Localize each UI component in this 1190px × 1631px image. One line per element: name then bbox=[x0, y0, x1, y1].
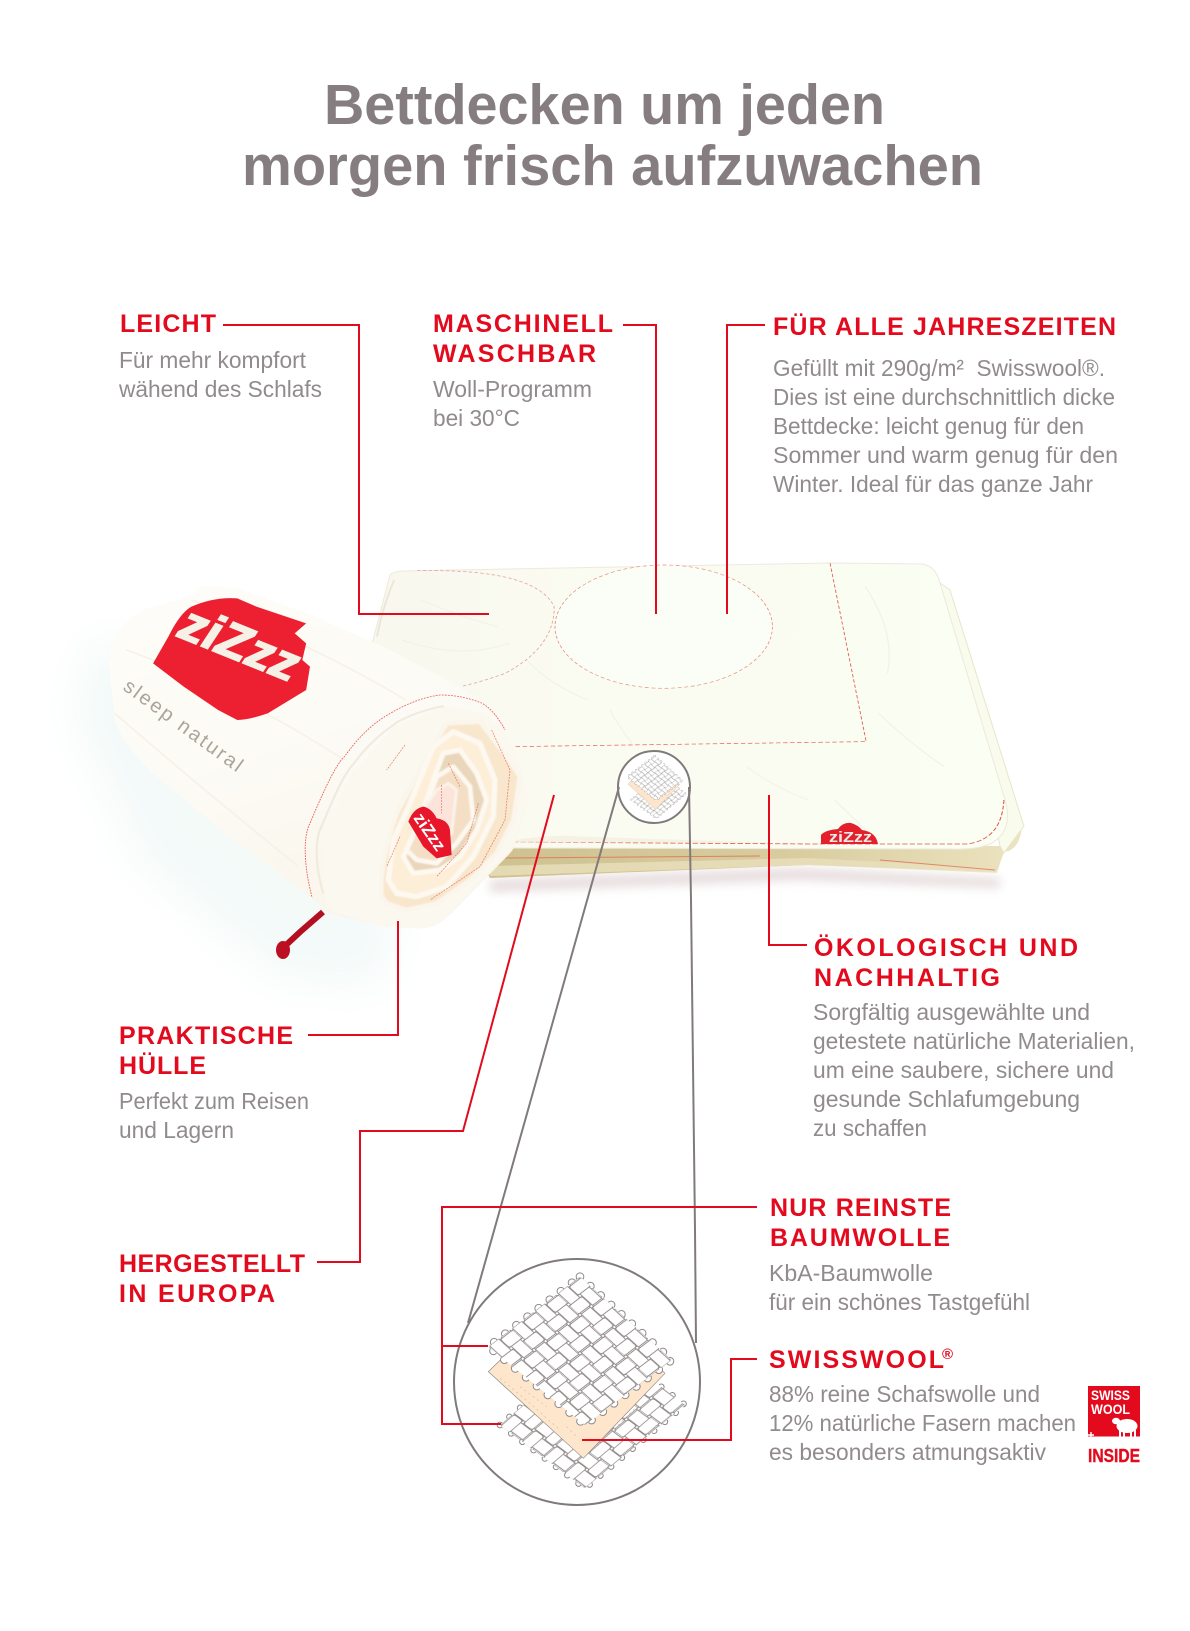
title: morgen frisch aufzuwachen bbox=[242, 134, 983, 198]
callout: Ökologisch und nachhaltig bbox=[813, 933, 1135, 1141]
callout: Ökologisch und nachhaltig: um eine saubere, sichere und bbox=[813, 1057, 1114, 1083]
leader line: Swisswool bbox=[582, 1359, 757, 1440]
callout: Maschinell waschbar: WASCHBAR bbox=[433, 340, 596, 368]
bag slogan: sleep natural bbox=[119, 675, 247, 777]
callout: Leicht: LEICHT bbox=[120, 310, 216, 338]
cord knot bbox=[276, 941, 290, 959]
callout: Nur reinste Baumwolle bbox=[769, 1194, 1030, 1315]
callout: Nur reinste Baumwolle: für ein schönes Tastgefühl bbox=[769, 1289, 1030, 1315]
photo: flat folded quilted blanket bbox=[340, 563, 1024, 892]
blanket logo tag: ziZzz bbox=[829, 829, 872, 846]
blanket logo tag bbox=[821, 823, 878, 846]
callout: Maschinell waschbar: Woll-Programm bbox=[433, 376, 592, 402]
callout: Praktische Hülle: PRAKTISCHE bbox=[119, 1022, 293, 1050]
callout: Maschinell waschbar bbox=[433, 310, 613, 431]
callout: Maschinell waschbar: MASCHINELL bbox=[433, 310, 613, 338]
icon: Swisswool Inside badge: INSIDE bbox=[1088, 1446, 1140, 1466]
roll soft shadow bbox=[75, 640, 400, 985]
icon: Swisswool Inside badge: WOOL bbox=[1091, 1401, 1130, 1417]
bag cuff bbox=[323, 707, 528, 928]
callout: Ökologisch und nachhaltig: Sorgfältig ausgewählte und bbox=[813, 999, 1090, 1025]
title: Bettdecken um jeden bbox=[324, 73, 885, 137]
blanket stitching and wrinkles, right bbox=[500, 563, 1004, 844]
callout: Nur reinste Baumwolle: KbA-Baumwolle bbox=[769, 1260, 933, 1286]
callout: Swisswool: 88% reine Schafswolle und bbox=[769, 1381, 1040, 1407]
callout: Praktische Hülle: Perfekt zum Reisen bbox=[119, 1088, 309, 1114]
callout: Swisswool: es besonders atmungsaktiv bbox=[769, 1439, 1046, 1465]
callout: Ökologisch und nachhaltig: zu schaffen bbox=[813, 1115, 927, 1141]
small tag wordmark: ziZzz bbox=[410, 809, 449, 855]
callout: Hergestellt in Europa bbox=[119, 1250, 305, 1308]
callout: Nur reinste Baumwolle: BAUMWOLLE bbox=[770, 1224, 950, 1252]
callout: Für alle Jahreszeiten: Winter. Ideal für das ganze Jahr bbox=[773, 471, 1093, 497]
leader line: Leicht bbox=[223, 325, 489, 614]
callout: Swisswool: 12% natürliche Fasern machen bbox=[769, 1410, 1076, 1436]
roll body bbox=[109, 586, 528, 928]
callout: Ökologisch und nachhaltig: NACHHALTIG bbox=[814, 964, 1000, 992]
blanket lower folded layers bbox=[470, 820, 1022, 878]
callout: Ökologisch und nachhaltig: ÖKOLOGISCH UND bbox=[814, 933, 1078, 962]
title bbox=[242, 73, 983, 198]
callout: Nur reinste Baumwolle: NUR REINSTE bbox=[770, 1194, 951, 1222]
callout: Für alle Jahreszeiten: Dies ist eine durchschnittlich dicke bbox=[773, 384, 1115, 410]
drawstring cord bbox=[285, 912, 323, 946]
small magnifier circle on blanket bbox=[618, 751, 690, 823]
icon: Swisswool Inside badge bbox=[1088, 1386, 1140, 1466]
callout: Für alle Jahreszeiten: Gefüllt mit 290g/m² Swisswool®. bbox=[773, 355, 1105, 381]
callout: Maschinell waschbar: bei 30°C bbox=[433, 405, 520, 431]
photo: rolled blanket in carrying bag bbox=[75, 586, 528, 985]
callout: Leicht bbox=[118, 310, 322, 402]
big logo wordmark: ziZzz bbox=[171, 594, 308, 693]
callout: Swisswool bbox=[769, 1346, 1076, 1465]
leader line: Baumwolle bbox=[442, 1207, 757, 1424]
callout: Für alle Jahreszeiten: FÜR ALLE JAHRESZEITEN bbox=[773, 312, 1116, 341]
blanket top face bbox=[340, 563, 1007, 849]
callout: Leicht: Für mehr kompfort bbox=[119, 347, 307, 373]
leader line: Maschinell waschbar bbox=[623, 325, 656, 614]
callout: Für alle Jahreszeiten: Bettdecke: leicht genug für den bbox=[773, 413, 1084, 439]
callout: Hergestellt in Europa: HERGESTELLT bbox=[119, 1250, 305, 1278]
leader line: Für alle Jahreszeiten bbox=[727, 325, 765, 614]
callout: Praktische Hülle: HÜLLE bbox=[119, 1051, 206, 1080]
leader line: Ökologisch bbox=[769, 795, 807, 945]
blanket stitching and wrinkles, left bbox=[377, 571, 554, 686]
callout: Für alle Jahreszeiten bbox=[773, 312, 1118, 497]
magnifier connector lines bbox=[468, 787, 696, 1343]
callout: Swisswool: ® bbox=[942, 1346, 953, 1363]
callout: Hergestellt in Europa: IN EUROPA bbox=[119, 1280, 275, 1308]
callout: Swisswool: SWISSWOOL bbox=[769, 1346, 944, 1374]
big red logo blob bbox=[153, 598, 310, 720]
roll spiral end bbox=[381, 722, 520, 910]
callout: Praktische Hülle bbox=[119, 1022, 309, 1143]
icon: sheep bbox=[1112, 1418, 1138, 1437]
callout: Ökologisch und nachhaltig: gesunde Schlafumgebung bbox=[813, 1086, 1080, 1112]
icon: Swisswool Inside badge: SWISS bbox=[1091, 1387, 1130, 1403]
leader line: Hergestellt bbox=[317, 795, 554, 1262]
callout: Praktische Hülle: und Lagern bbox=[119, 1117, 234, 1143]
callout: Für alle Jahreszeiten: Sommer und warm genug für den bbox=[773, 442, 1118, 468]
enlarged fabric layers circle bbox=[454, 1259, 700, 1505]
cuff stitched gather bbox=[305, 695, 505, 897]
blanket floor shadow bbox=[490, 868, 1000, 892]
leader line: Praktische Hülle bbox=[308, 921, 398, 1035]
callout: Ökologisch und nachhaltig: getestete natürliche Materialien, bbox=[813, 1028, 1135, 1054]
callout: Leicht: wähend des Schlafs bbox=[118, 376, 322, 402]
small red tag bbox=[408, 807, 452, 858]
